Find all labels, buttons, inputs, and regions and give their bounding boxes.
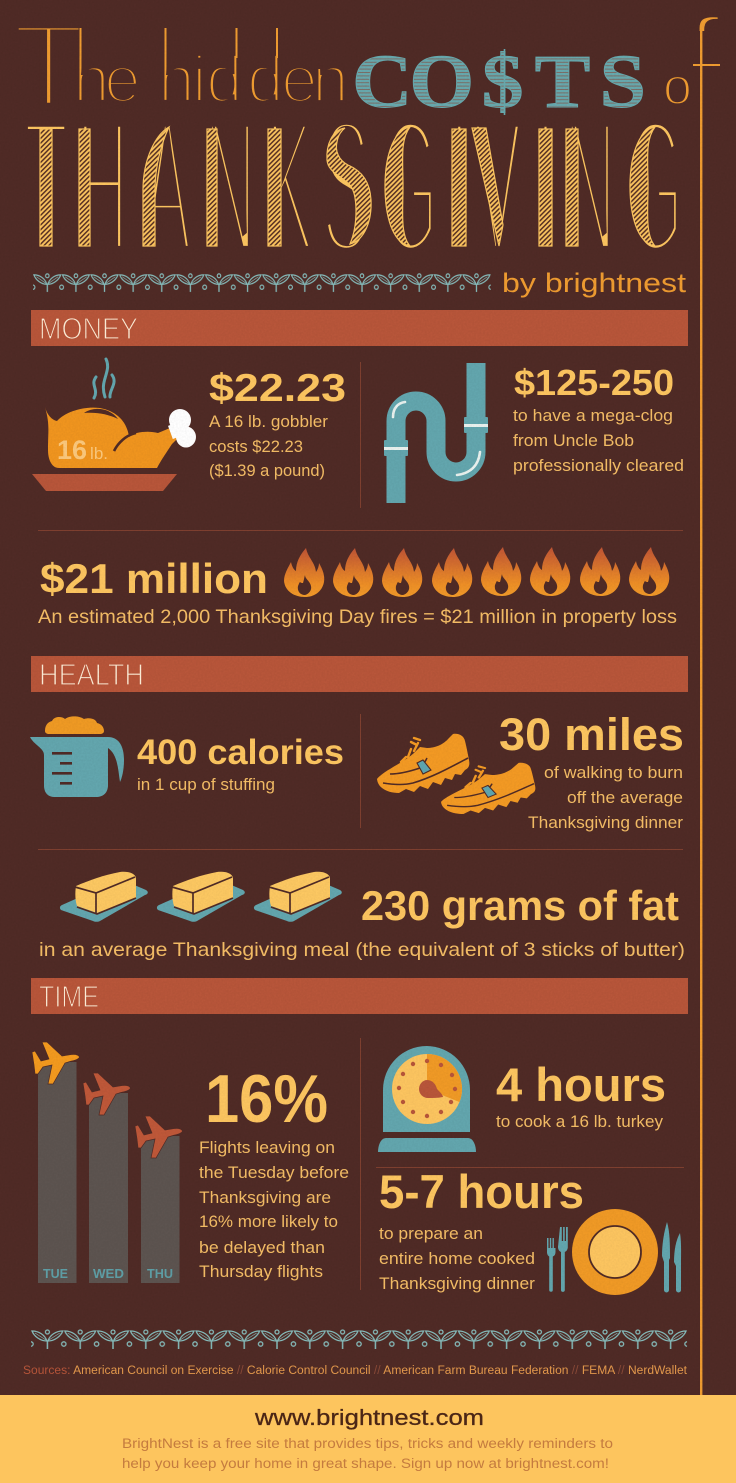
title: The hidden [12, 0, 349, 133]
stat: clog cost [513, 362, 684, 475]
stat: clog cost: $125-250 [514, 362, 674, 403]
stat: stuffing calories: in 1 cup of stuffing [137, 775, 275, 794]
stat: miles walked [499, 709, 684, 832]
stat: flight delay percent: be delayed than [199, 1238, 325, 1257]
stat: fire loss [38, 547, 677, 628]
stat: grams of fat: in an average Thanksgiving meal (the equivalent of 3 sticks of butter) [39, 939, 685, 961]
bar chart: flight delays by day: THU [147, 1266, 173, 1281]
title: The hidden: T [12, 0, 85, 133]
stat: miles walked: 30 miles [499, 709, 684, 760]
heading: money: MONEY [39, 311, 138, 346]
icon: flames [284, 547, 669, 597]
stat: miles walked: Thanksgiving dinner [528, 813, 683, 832]
stat: flight delay percent: Flights leaving on [199, 1138, 335, 1157]
ornament: leaf border bottom [31, 1328, 687, 1350]
byline: by brightnest [502, 268, 687, 298]
icon: turkey on a platter [32, 407, 196, 491]
stat: flight delay percent: 16% [205, 1061, 328, 1137]
ornament: leaf border top [33, 272, 491, 293]
sources: Sources: American Council on Exercise // Calorie Control Council // American Farm Bureau Federation // FEMA // NerdWallet [23, 1365, 688, 1377]
stat: flight delay percent: Thanksgiving are [199, 1188, 331, 1207]
stat: turkey cost [209, 367, 346, 480]
stat: fire loss: $21 million [40, 555, 268, 602]
stat: preparation hours: entire home cooked [379, 1249, 535, 1268]
panel: time section [31, 978, 688, 1295]
stat: flight delay percent: the Tuesday before [199, 1163, 349, 1182]
stat: preparation hours [379, 1165, 584, 1293]
panel: health section [30, 656, 688, 961]
heading: money [31, 310, 688, 346]
icon: drain pipe [384, 363, 488, 503]
stat: turkey cost: costs $22.23 [209, 437, 303, 456]
icon: airplanes [32, 1042, 182, 1158]
stat: flight delay percent [199, 1061, 349, 1281]
stat: stuffing calories [137, 733, 344, 794]
stat: preparation hours: 5-7 hours [379, 1165, 584, 1218]
heading: health: HEALTH [39, 657, 144, 692]
title: COSTS: CO$TS [352, 40, 646, 124]
bar chart: flight delays by day: WED [93, 1266, 124, 1281]
title: The hidden: he hidden [73, 42, 349, 116]
bar chart: flight delays by day [32, 1042, 182, 1283]
stat: miles walked: off the average [567, 788, 683, 807]
stat: clog cost: from Uncle Bob [513, 431, 634, 450]
stat: clog cost: to have a mega-clog [513, 406, 673, 425]
stat: cooking hours: 4 hours [496, 1058, 666, 1111]
heading: health [31, 656, 688, 692]
footer band: BrightNest is a free site that provides tips, tricks and weekly reminders to [122, 1436, 613, 1451]
stat: grams of fat [39, 882, 685, 961]
icon: place setting [547, 1209, 681, 1295]
footer band [0, 1395, 736, 1483]
stat: stuffing calories: 400 calories [137, 733, 344, 772]
stat: flight delay percent: Thursday flights [199, 1262, 323, 1281]
panel: money section [31, 310, 688, 628]
footer band: www.brightnest.com [254, 1405, 484, 1430]
title: of [666, 17, 720, 104]
stat: turkey cost: $22.23 [209, 367, 346, 410]
stat: cooking hours: to cook a 16 lb. turkey [496, 1112, 663, 1131]
icon: turkey on a platter: 16lb. [57, 435, 108, 465]
icon: walking shoes [377, 734, 535, 814]
heading: time: TIME [39, 979, 99, 1014]
stat: preparation hours: to prepare an [379, 1224, 483, 1243]
bar chart: flight delays by day: TUE [43, 1266, 68, 1281]
stat: turkey cost: A 16 lb. gobbler [209, 412, 328, 431]
stat: miles walked: of walking to burn [544, 763, 683, 782]
title: THANKSGIVING: THANKSGIVING [24, 79, 683, 293]
stat: grams of fat: 230 grams of fat [361, 882, 679, 929]
stat: flight delay percent: 16% more likely to [199, 1212, 338, 1231]
stat: clog cost: professionally cleared [513, 456, 684, 475]
vertical orange rule [700, 30, 702, 1395]
icon: oven timer [378, 1046, 476, 1152]
icon: steam [94, 359, 114, 398]
icon: sticks of butter [60, 872, 342, 922]
icon: measuring cup of stuffing [30, 716, 124, 797]
stat: turkey cost: ($1.39 a pound) [209, 461, 325, 480]
footer band: help you keep your home in great shape. Sign up now at brightnest.com! [122, 1456, 609, 1471]
stat: fire loss: An estimated 2,000 Thanksgiving Day fires = $21 million in property loss [38, 606, 677, 628]
heading: time [31, 978, 688, 1014]
title: of: o [663, 58, 692, 116]
stat: preparation hours: Thanksgiving dinner [379, 1274, 535, 1293]
